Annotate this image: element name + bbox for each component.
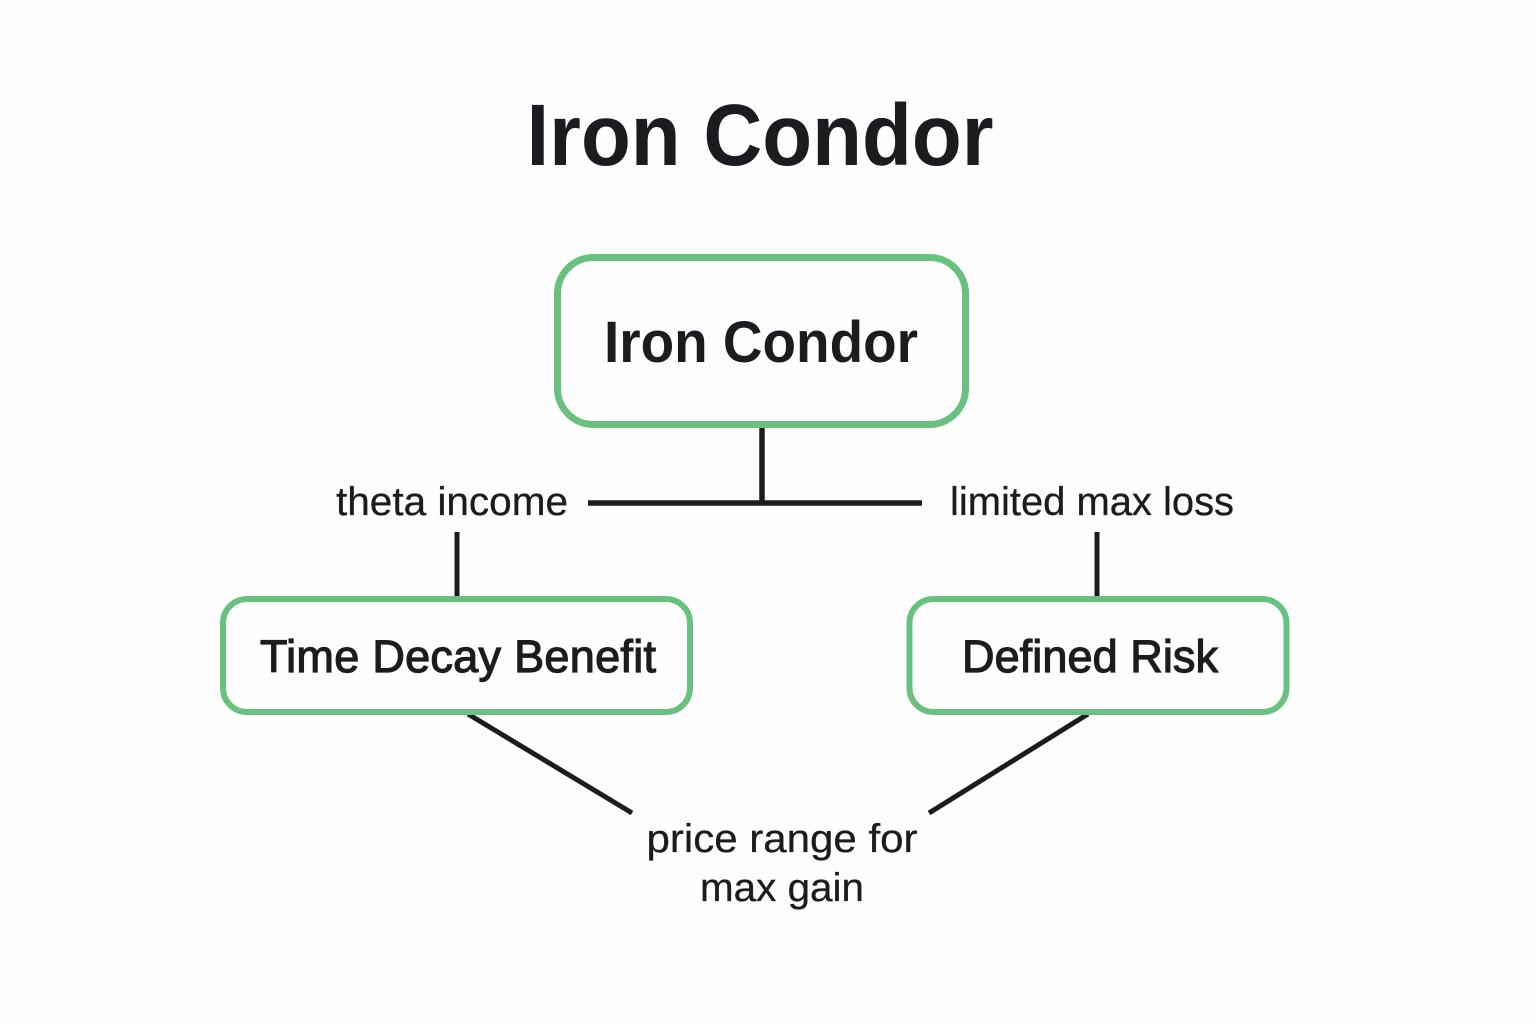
connector: limited max loss to Defined Risk bbox=[1094, 532, 1100, 598]
panel: Defined Risk: Defined Risk bbox=[962, 631, 1218, 682]
panel: Time Decay Benefit: Time Decay Benefit bbox=[260, 631, 656, 682]
connector: Time Decay Benefit to price range bbox=[468, 714, 632, 813]
title: Iron Condor bbox=[526, 87, 994, 184]
label: price range for max gain: price range for bbox=[646, 817, 918, 861]
connector: Defined Risk to price range bbox=[929, 714, 1088, 813]
connector: theta income to Time Decay Benefit bbox=[454, 532, 460, 598]
panel: top box Iron Condor bbox=[558, 258, 966, 424]
label: limited max loss: limited max loss bbox=[950, 480, 1234, 524]
label: price range for max gain: max gain bbox=[700, 866, 864, 910]
panel: top box Iron Condor: Iron Condor bbox=[604, 310, 918, 375]
connector: top box to horizontal bar bbox=[588, 426, 922, 503]
label: theta income: theta income bbox=[336, 480, 568, 524]
panel: Time Decay Benefit bbox=[223, 599, 690, 712]
panel: Defined Risk bbox=[910, 599, 1286, 712]
label: price range for max gain bbox=[646, 817, 918, 910]
